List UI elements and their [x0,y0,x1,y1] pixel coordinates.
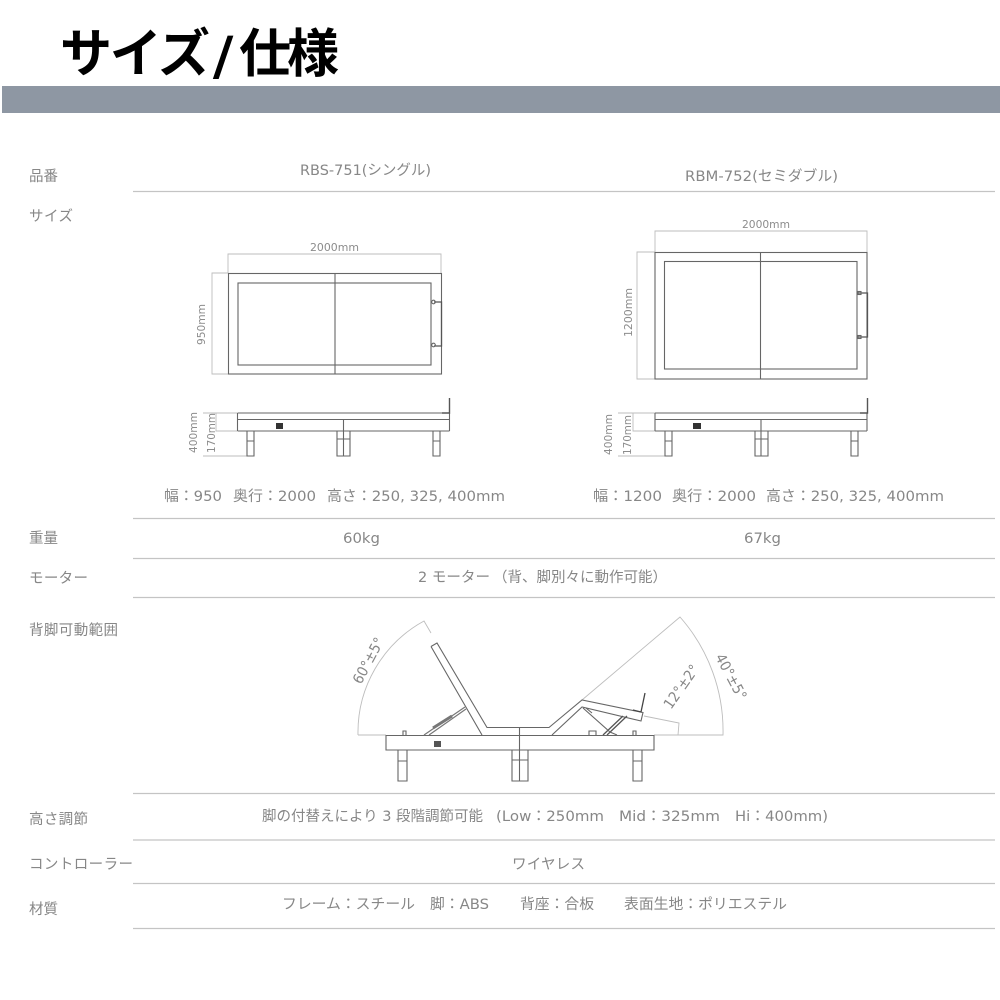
top view: semi-double [637,231,868,379]
size text: single [164,488,505,505]
side view: single [203,398,450,456]
dimension: 170mm: 170mm [621,415,634,455]
size text: semi-double [593,488,944,505]
dimension: 2000mm: 2000mm [310,241,359,254]
base frame [386,727,654,781]
size text: semi-double: 高さ：250, 325, 400mm [766,488,944,505]
angle label: 12: 12°±2° [661,662,703,712]
angle label: 60: 60°±5° [350,635,388,687]
row label: controller: コントローラー [29,853,133,874]
dimension: 1200mm: 1200mm [622,288,635,337]
size text: single: 幅：950 [164,488,222,505]
size text: semi-double: 幅：1200 [593,488,662,505]
motor value [418,566,667,587]
title: サイズ [60,12,210,87]
row label: weight: 重量 [29,527,58,548]
title: 仕様 [239,12,339,87]
dimension: 950mm: 950mm [195,304,208,345]
weight: single: 60kg [343,531,380,547]
header bar [2,86,1000,113]
weight: semi-double: 67kg [744,531,781,547]
side view: semi-double [618,398,868,456]
back frame [431,643,643,735]
model name: semi-double: RBM-752(セミダブル) [685,167,838,185]
model name: single: RBS-751(シングル) [300,162,431,179]
height value: Mid：325mm [619,809,720,825]
height value: 脚の付替えにより 3 段階調節可能 [262,808,483,825]
legs [398,750,642,781]
controller value: ワイヤレス [512,853,585,874]
leg material: 脚：ABS [430,896,489,913]
leg angle sectors [582,617,723,735]
small details [403,731,636,735]
angle label: 40: 40°±5° [711,651,749,703]
row label: range of motion: 背脚可動範囲 [29,619,118,640]
frame material: フレーム：スチール [282,897,415,913]
back material: 背座：合板 [520,896,595,913]
motor value: 2 モーター [418,569,490,586]
title [60,12,339,87]
dimension: 2000mm: 2000mm [742,218,790,231]
leg actuator [603,716,627,735]
title: / [212,20,235,84]
back angle sector [358,621,431,735]
row label: material: 材質 [29,898,58,919]
height value: (Low：250mm [496,809,604,825]
top view: single [212,254,442,374]
surface material: 表面生地：ポリエステル [624,896,787,913]
diagram: single bed size [187,241,450,456]
row label: height adjustment: 高さ調節 [29,808,88,829]
size text: semi-double: 奥行：2000 [672,488,756,505]
size text: single: 奥行：2000 [233,488,316,505]
size text: single: 高さ：250, 325, 400mm [327,488,505,505]
row label: size: サイズ [29,205,73,226]
row label: motor: モーター [29,567,88,588]
motor value: （背、脚別々に動作可能） [493,566,667,587]
dimension: 170mm: 170mm [205,413,218,453]
dimension: 400mm: 400mm [602,414,615,455]
row label: product number: 品番 [29,165,58,186]
diagram: semi-double bed size [602,218,868,456]
foot stop [633,693,645,712]
material values [282,896,787,913]
dimension: 400mm: 400mm [187,412,200,453]
height value: Hi：400mm) [735,809,828,825]
diagram: back and leg range of motion [358,617,723,781]
back actuator [424,707,466,735]
height value [262,808,828,825]
